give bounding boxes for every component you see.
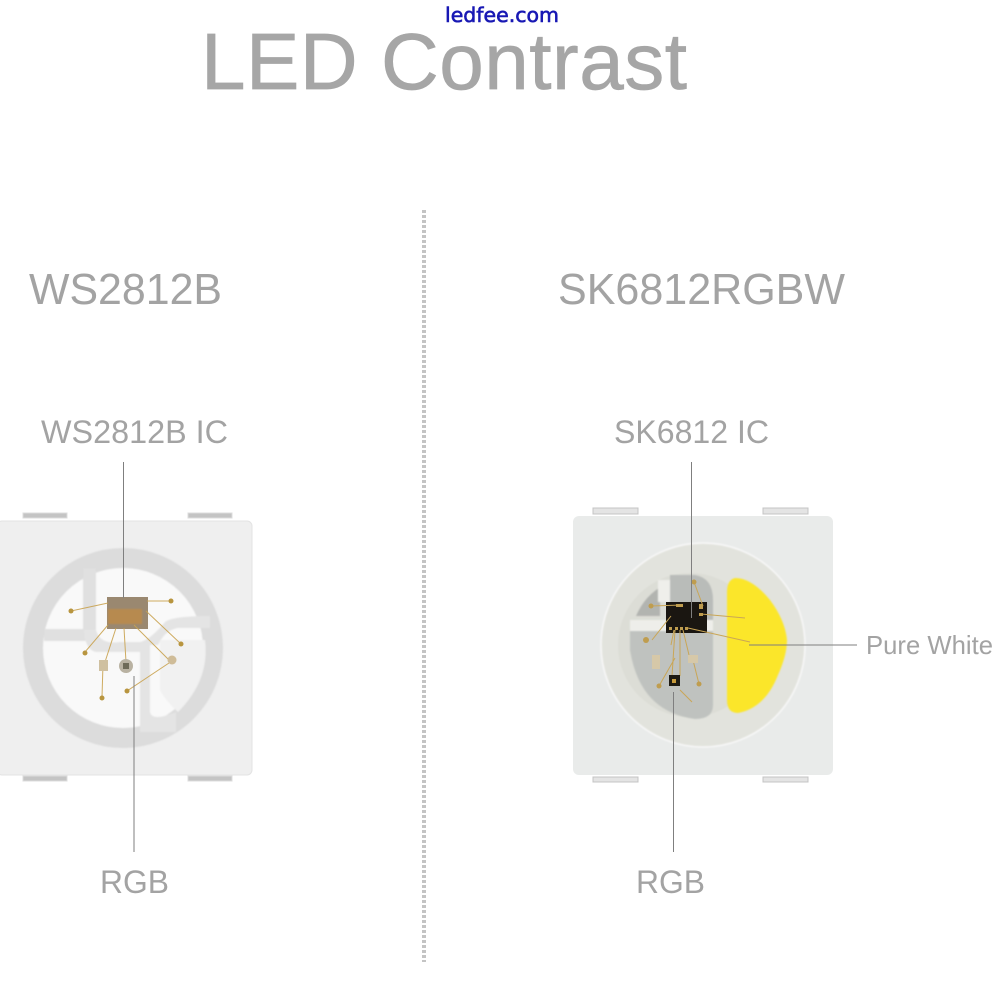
label: SK6812 IC: SK6812 IC [614, 414, 769, 450]
heading: WS2812B: WS2812B [29, 265, 222, 314]
left IC chip [107, 597, 148, 629]
right bond wires [651, 582, 750, 702]
right bond pads [643, 580, 703, 688]
leader: WS2812B IC [122, 462, 124, 598]
label: Pure White: Pure White [866, 630, 993, 660]
left RGB die [119, 659, 133, 673]
label: left RGB: RGB [100, 864, 169, 900]
title: LED Contrast [201, 17, 687, 106]
centre divider [422, 210, 426, 962]
left bond wires [71, 601, 181, 697]
left LED ring [33, 558, 213, 738]
left bond pads [68, 598, 184, 700]
left LED body [0, 521, 252, 775]
right white LED phosphor [727, 578, 787, 713]
label: WS2812B IC: WS2812B IC [41, 414, 228, 450]
right LED pins [593, 508, 808, 782]
leader: Pure White [749, 644, 857, 646]
watermark: ledfee.com: ledfee.com [445, 3, 559, 27]
right IC chip [666, 602, 707, 633]
right LED body [573, 516, 833, 775]
right RGB die [669, 675, 680, 686]
leader: left RGB [133, 676, 135, 852]
left LED pins [23, 513, 232, 781]
leader lines [124, 462, 857, 852]
right LED lens [601, 543, 805, 747]
leader: right RGB [672, 692, 674, 852]
right LED package [573, 508, 833, 782]
label: right RGB: RGB [636, 864, 705, 900]
left LED package [0, 513, 252, 781]
right LED grey pads [630, 575, 713, 719]
heading: SK6812RGBW: SK6812RGBW [558, 265, 845, 314]
leader: SK6812 IC [690, 462, 692, 618]
